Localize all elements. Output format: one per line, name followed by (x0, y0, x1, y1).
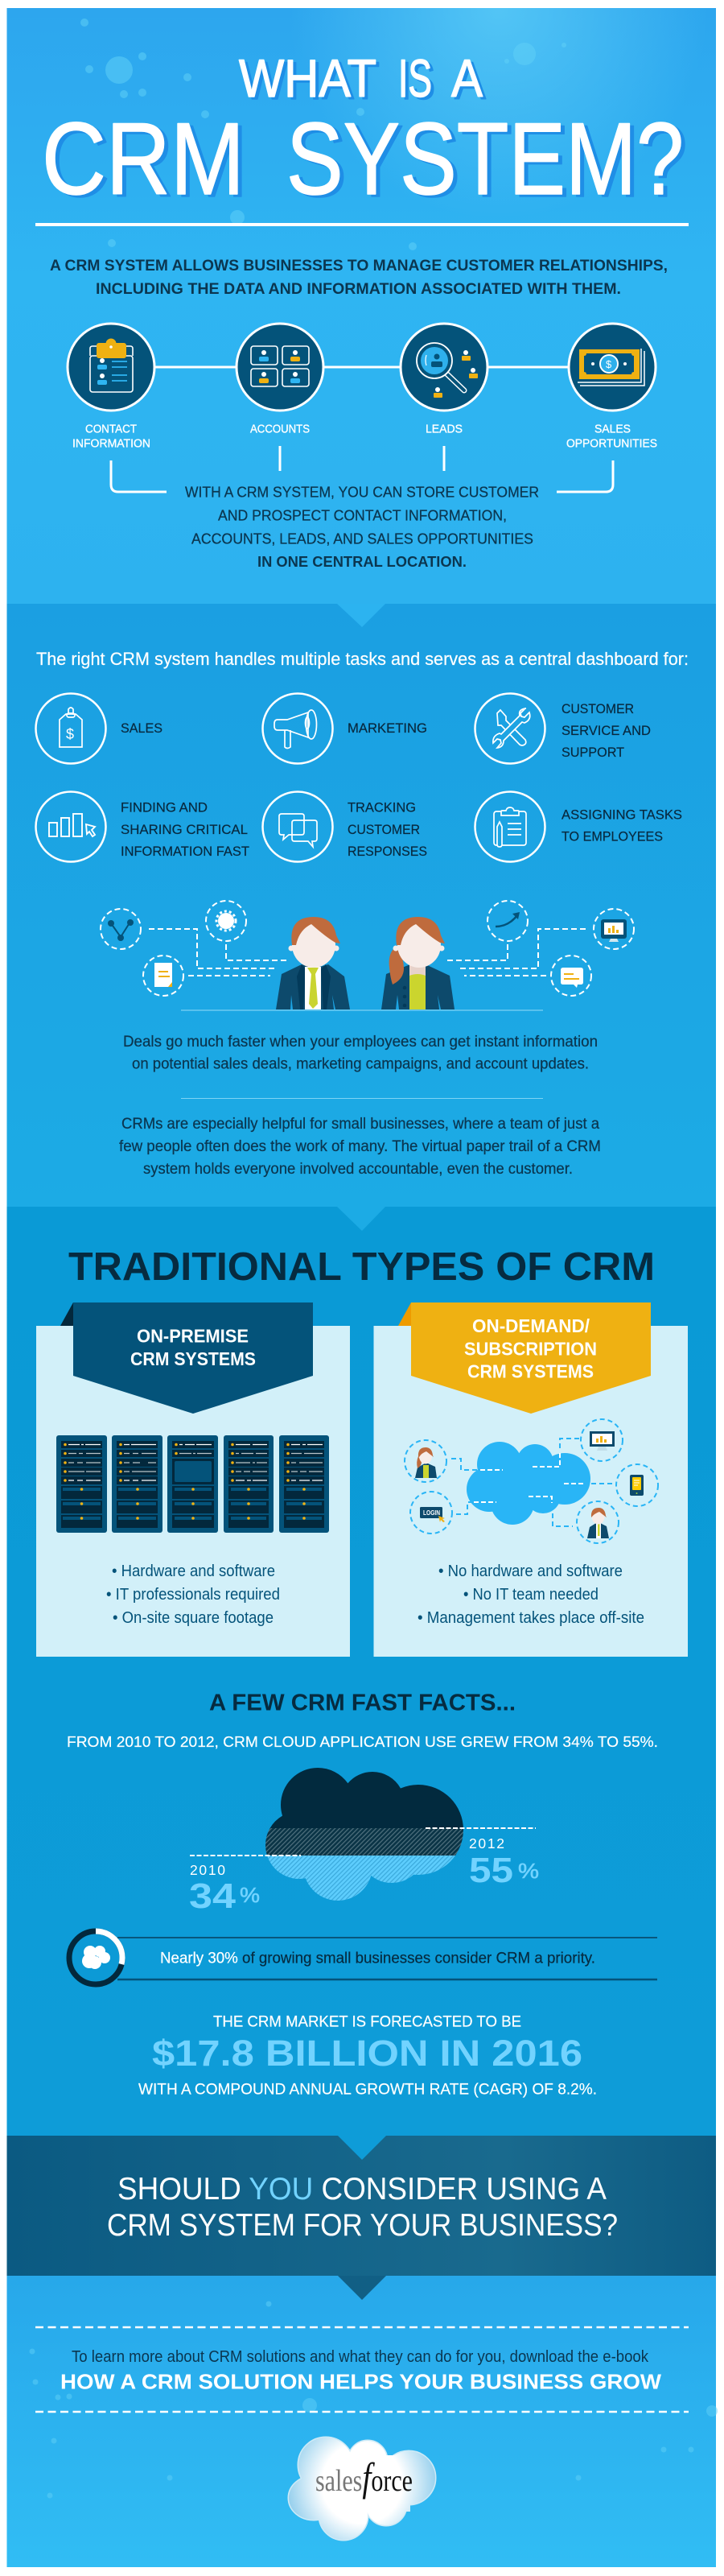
label 2010: 2010 (190, 1862, 225, 1878)
login button: LOGIN (423, 1509, 440, 1517)
monitor icon (590, 1431, 615, 1451)
task labels: SERVICE AND (562, 723, 651, 738)
title (42, 48, 688, 218)
task labels: INFORMATION FAST (121, 844, 249, 859)
task labels: SHARING CRITICAL (121, 822, 248, 837)
woman (381, 917, 455, 1009)
icon: task clipboard (475, 792, 545, 861)
man (276, 917, 350, 1009)
title: IS (398, 48, 432, 108)
icon: leads (401, 324, 487, 411)
body text: deals (123, 1034, 598, 1072)
fact: 30 percent priority (69, 1931, 657, 1984)
title: IS (401, 51, 435, 110)
fact: market forecast: WITH A COMPOUND ANNUAL GROWTH RATE (CAGR) OF 8.2%. (138, 2082, 597, 2098)
body text: deals: on potential sales deals, marketing campaigns, and account updates. (132, 1056, 589, 1072)
chart: cloud fill 34% to 55% (189, 1763, 539, 1916)
fact: market forecast: THE CRM MARKET IS FORECASTED TO BE (213, 2014, 521, 2030)
logo: salesforce cloud (289, 2438, 435, 2540)
icon labels (72, 422, 657, 451)
icon: sales opportunities: $ (606, 358, 612, 370)
banner: should you consider (6, 2136, 716, 2300)
intro text: A CRM SYSTEM ALLOWS BUSINESSES TO MANAGE CUSTOMER RELATIONSHIPS, (50, 258, 668, 275)
label 2010: 34 (189, 1876, 237, 1916)
central location paragraph: AND PROSPECT CONTACT INFORMATION, (218, 507, 507, 523)
bullets: on-premise: • IT professionals required (106, 1586, 280, 1604)
icon: sales tag (35, 694, 106, 763)
intro text (50, 258, 668, 298)
label 2012: % (518, 1859, 539, 1883)
bullets: on-demand (418, 1563, 644, 1627)
illustration: two employees connected to information (101, 901, 634, 1011)
title: A (455, 51, 486, 110)
icon: tools (475, 694, 545, 763)
task labels: TRACKING (348, 800, 416, 815)
banner: on-premise: CRM SYSTEMS (130, 1348, 256, 1369)
banner: should you consider: SHOULD YOU CONSIDER USING A (117, 2172, 607, 2207)
fact: market forecast (138, 2014, 597, 2098)
task labels (121, 701, 682, 859)
label 2012 (469, 1835, 539, 1890)
banner: on-demand: ON-DEMAND/ (472, 1315, 590, 1336)
icon labels: LEADS (426, 422, 463, 436)
banner: on-premise (73, 1302, 313, 1414)
call to action: To learn more about CRM solutions and what they can do for you, download the e-book (72, 2348, 649, 2366)
icon labels: ACCOUNTS (250, 422, 310, 436)
task labels: MARKETING (348, 720, 427, 736)
title: CRM (42, 101, 245, 216)
banner: should you consider: CRM SYSTEM FOR YOUR BUSINESS? (107, 2208, 618, 2243)
title: WHAT (242, 51, 380, 110)
logo: salesforce cloud: salesforce (315, 2454, 413, 2500)
body text: deals: Deals go much faster when your employees can get instant information (123, 1034, 598, 1051)
bullets: on-demand: • No IT team needed (463, 1586, 599, 1604)
fact: cloud use growth text: FROM 2010 TO 2012, CRM CLOUD APPLICATION USE GREW FROM 34% TO 55%. (67, 1734, 658, 1750)
icon labels: CONTACT (85, 422, 137, 436)
label 2010 (189, 1862, 260, 1916)
central location paragraph: ACCOUNTS, LEADS, AND SALES OPPORTUNITIES (191, 531, 533, 547)
icon: chat bubbles (262, 792, 333, 861)
banner: on-premise: ON-PREMISE (137, 1325, 249, 1346)
task labels: CUSTOMER (562, 701, 634, 716)
icon: chart with cursor (35, 792, 106, 861)
dashboard heading: The right CRM system handles multiple tasks and serves as a central dashboard for: (36, 649, 689, 669)
title: CRM (46, 104, 249, 218)
icon labels: SALES (594, 422, 631, 436)
icon: contact information (68, 324, 154, 411)
body text: small businesses: system holds everyone involved accountable, even the customer. (143, 1161, 573, 1178)
icon: sales tag: $ (66, 726, 74, 742)
title: A (451, 48, 483, 108)
icon labels: OPPORTUNITIES (566, 436, 657, 451)
bullets: on-demand: • Management takes place off-site (418, 1609, 644, 1627)
banner: on-demand (411, 1302, 651, 1414)
task labels: SUPPORT (562, 745, 624, 760)
cloud network (405, 1419, 658, 1543)
label 2010: % (240, 1883, 260, 1907)
heading: traditional types of CRM: TRADITIONAL TYPES OF CRM (68, 1245, 655, 1289)
section: final call background (6, 2276, 718, 2567)
icon: sales opportunities (569, 324, 656, 411)
phone icon (630, 1475, 644, 1496)
section: dashboard background (6, 604, 716, 1207)
central location paragraph: IN ONE CENTRAL LOCATION. (257, 554, 467, 570)
banner: on-demand: SUBSCRIPTION (464, 1338, 597, 1359)
call to action (35, 2327, 689, 2412)
task labels: CUSTOMER (348, 822, 420, 837)
panel: on-demand (373, 1302, 688, 1657)
login button (420, 1507, 445, 1522)
label 2012: 55 (469, 1851, 513, 1890)
bullets: on-premise: • Hardware and software (112, 1563, 275, 1580)
task labels: RESPONSES (348, 844, 427, 859)
panel: on-premise (36, 1302, 350, 1657)
central location paragraph (185, 485, 539, 570)
task labels: ASSIGNING TASKS (562, 807, 682, 823)
man avatar (587, 1508, 609, 1538)
connector brackets (111, 446, 613, 492)
task labels: TO EMPLOYEES (562, 829, 663, 844)
banner: on-demand: CRM SYSTEMS (467, 1360, 594, 1381)
task labels: SALES (121, 720, 162, 736)
woman avatar (415, 1447, 437, 1478)
intro text: INCLUDING THE DATA AND INFORMATION ASSOCIATED WITH THEM. (96, 281, 621, 298)
bullets: on-premise: • On-site square footage (113, 1609, 274, 1627)
fact: market forecast: $17.8 BILLION IN 2016 (152, 2033, 582, 2074)
call to action: HOW A CRM SOLUTION HELPS YOUR BUSINESS GROW (60, 2370, 661, 2394)
label 2012: 2012 (469, 1835, 504, 1852)
central location paragraph: WITH A CRM SYSTEM, YOU CAN STORE CUSTOMER (185, 485, 539, 501)
body text: small businesses: CRMs are especially helpful for small businesses, where a team of just a (121, 1116, 599, 1133)
title: WHAT (239, 48, 376, 108)
fact: 30 percent priority: Nearly 30% of growing small businesses consider CRM a priority. (160, 1950, 595, 1967)
server racks (56, 1435, 329, 1533)
bullets: on-premise (106, 1563, 280, 1627)
section: what is a CRM background (6, 8, 716, 604)
task labels: FINDING AND (121, 800, 208, 815)
body text: small businesses: few people often does the work of many. The virtual paper trail of a CRM (119, 1138, 601, 1155)
body text: small businesses (119, 1116, 601, 1178)
bullets: on-demand: • No hardware and software (438, 1563, 623, 1580)
icon: megaphone (262, 694, 333, 763)
section: traditional types and fast facts background (6, 1207, 716, 2136)
icon labels: INFORMATION (72, 436, 150, 451)
heading: fast facts: A FEW CRM FAST FACTS... (209, 1690, 516, 1716)
icon: accounts (237, 324, 323, 411)
